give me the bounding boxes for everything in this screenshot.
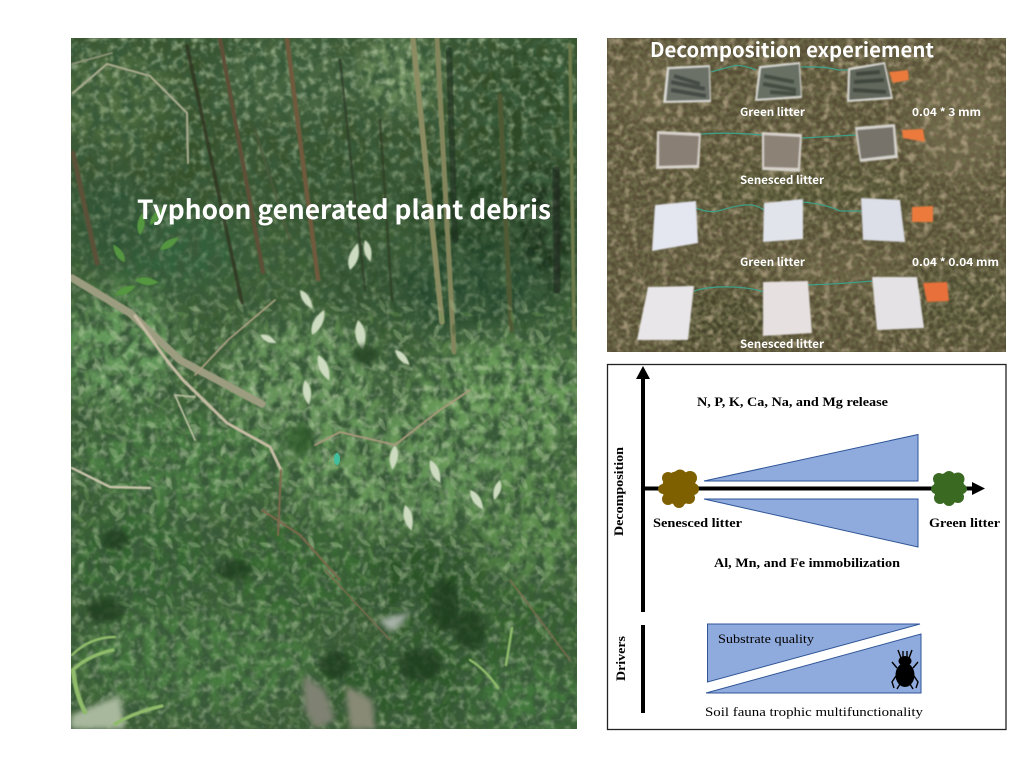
fine mesh bags row 4: senesced litter xyxy=(637,277,949,340)
photo labels xyxy=(740,104,999,352)
photo labels: Green litter xyxy=(740,104,805,120)
icon: green litter blob xyxy=(931,471,967,506)
triangle: soil fauna xyxy=(706,634,921,693)
foliage leaves xyxy=(71,270,577,729)
tree trunks xyxy=(73,39,574,352)
grass blades bottom left xyxy=(72,628,512,724)
drivers axis line xyxy=(641,625,645,713)
panel: conceptual diagram xyxy=(608,364,1006,730)
decomposition vertical axis arrow xyxy=(636,366,650,612)
label: senesced litter: Senesced litter xyxy=(653,516,743,530)
mesh bags row 2: senesced litter xyxy=(656,124,925,172)
text: immobilization: Al, Mn, and Fe immobilization xyxy=(714,556,900,570)
connecting strings xyxy=(694,66,872,292)
teal tag in foliage xyxy=(334,453,340,465)
photo labels: Senesced litter xyxy=(740,336,824,352)
heading: decomposition experiment: Decomposition experiement xyxy=(650,34,935,63)
axis label: decomposition: Decomposition xyxy=(612,447,626,536)
photo labels: 0.04 * 0.04 mm xyxy=(912,254,999,270)
heading: typhoon generated plant debris: Typhoon generated plant debris xyxy=(137,190,551,227)
axis label: drivers: Drivers xyxy=(614,636,628,681)
fine mesh bags row 3: green litter xyxy=(652,198,933,251)
text: release: N, P, K, Ca, Na, and Mg release xyxy=(697,395,888,409)
panel: forest photo with fallen debris xyxy=(60,30,590,740)
photo labels: 0.04 * 3 mm xyxy=(912,104,981,120)
panel: decomposition experiment photo xyxy=(607,34,1020,352)
icon: beetle xyxy=(892,650,918,689)
photo labels: Green litter xyxy=(740,254,805,270)
icon: senesced litter blob xyxy=(658,470,699,508)
triangle: element immobilization xyxy=(704,499,918,547)
fallen branches xyxy=(72,53,570,660)
label: green litter: Green litter xyxy=(929,516,1001,530)
text: substrate quality: Substrate quality xyxy=(718,632,815,646)
mesh bags row 1: green litter xyxy=(663,62,909,103)
litter gradient horizontal arrow xyxy=(643,482,985,495)
triangle: substrate quality xyxy=(708,624,920,682)
photo labels: Senesced litter xyxy=(740,172,824,188)
triangle: element release xyxy=(704,434,918,481)
grey debris bag and stones xyxy=(71,612,412,729)
text: soil fauna trophic multifunctionality: Soil fauna trophic multifunctionality xyxy=(705,704,924,719)
